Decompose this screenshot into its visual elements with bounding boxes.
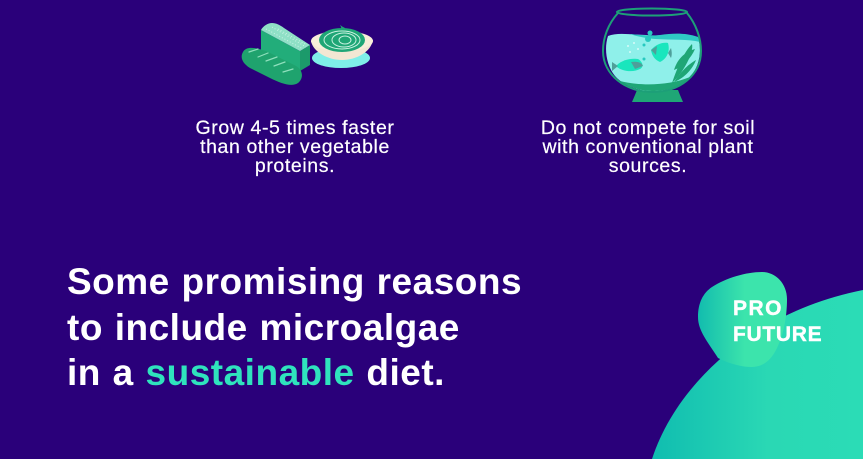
fish right bbox=[651, 43, 672, 62]
sparkles bbox=[627, 42, 639, 53]
logo: Pro Future bbox=[698, 272, 822, 367]
text: no soil competition: sources. bbox=[609, 155, 687, 177]
bowl base bbox=[632, 90, 683, 102]
title: in a sustainable diet. bbox=[67, 352, 445, 393]
text: no soil competition: Do not compete for soil bbox=[541, 117, 755, 139]
water band bbox=[630, 34, 700, 42]
water bbox=[606, 34, 700, 91]
logo: Pro Future: PRO bbox=[733, 297, 783, 320]
logo: Pro Future: FUTURE bbox=[733, 323, 822, 346]
sediment bbox=[620, 77, 690, 91]
text: no soil competition: with conventional plant bbox=[542, 136, 754, 158]
bubbles bbox=[642, 30, 652, 60]
title: Some promising reasons bbox=[67, 261, 522, 302]
text: faster growth: proteins. bbox=[255, 155, 335, 177]
baguette bbox=[242, 48, 302, 85]
text: faster growth: Grow 4-5 times faster bbox=[196, 117, 394, 139]
bowl bbox=[311, 25, 373, 68]
glass rim bbox=[617, 8, 687, 16]
glass outline bbox=[603, 13, 701, 92]
fish left bbox=[612, 59, 643, 71]
plant bbox=[672, 44, 696, 83]
text: no soil competition bbox=[541, 117, 755, 177]
bread loaf bbox=[261, 23, 310, 71]
title bbox=[67, 261, 522, 393]
text: faster growth: than other vegetable bbox=[200, 136, 390, 158]
title: to include microalgae bbox=[67, 306, 460, 348]
text: faster growth bbox=[196, 117, 394, 177]
